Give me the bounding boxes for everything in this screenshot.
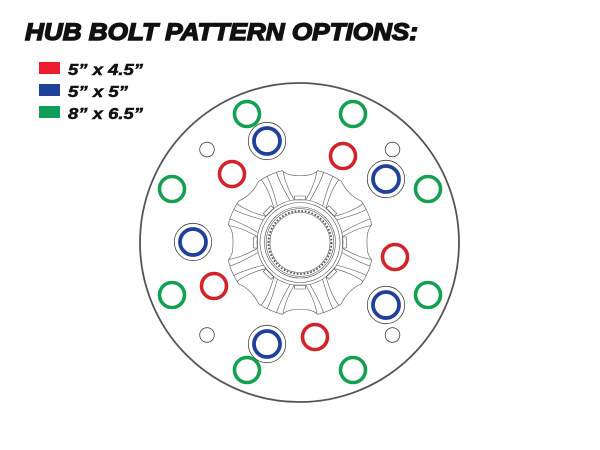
small unmarked holes	[200, 142, 400, 342]
blue 5 x 5 bolt holes	[174, 122, 405, 363]
hub centre	[228, 171, 372, 314]
red 5 x 4.5 bolt holes	[202, 144, 408, 350]
legend item: 5 x 4.5 red: 5” x 4.5”	[68, 62, 143, 79]
title: HUB BOLT PATTERN OPTIONS:	[25, 19, 418, 46]
legend	[39, 62, 143, 123]
hub disc outline	[140, 83, 459, 402]
legend item: 5 x 5 blue: 5” x 5”	[68, 84, 128, 101]
legend item: 8 x 6.5 green: 8” x 6.5”	[68, 106, 143, 123]
green 8 x 6.5 bolt holes	[160, 102, 440, 382]
